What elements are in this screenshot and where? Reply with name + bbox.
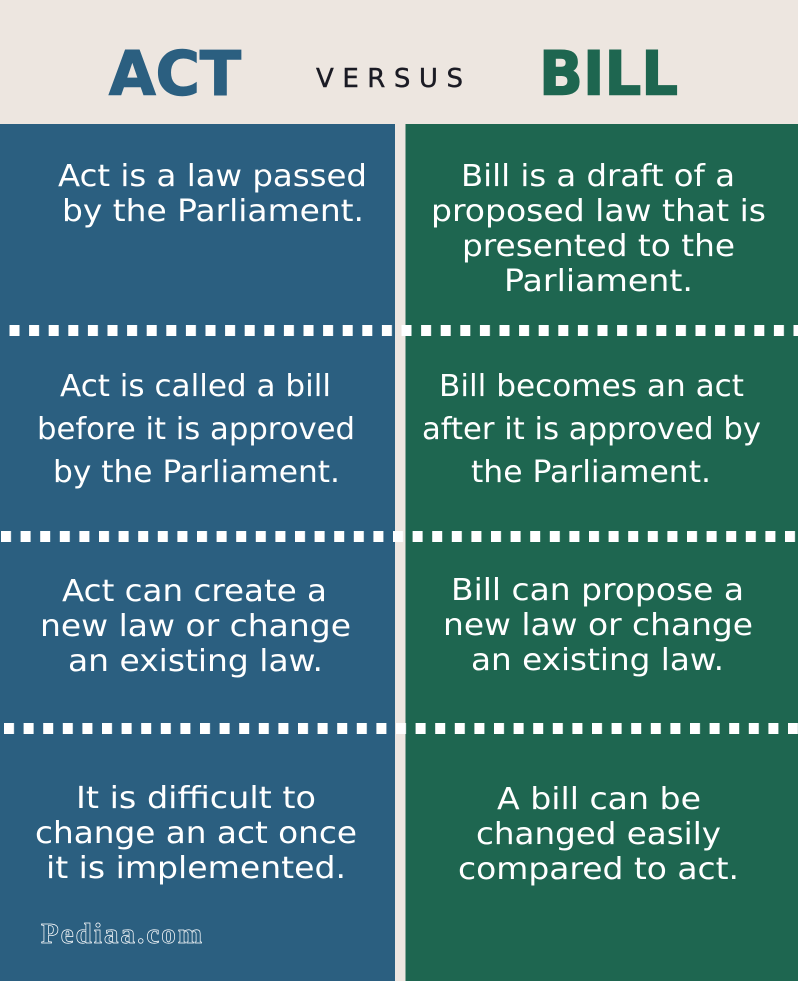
act point 4: change an act once	[35, 816, 357, 851]
act point 3: Act can create a	[62, 574, 327, 609]
bill point 3: an existing law.	[471, 643, 724, 678]
title: BILL: BILL	[539, 38, 678, 110]
watermark: Pediaa.com: Pediaa.com	[41, 918, 202, 950]
act point 2	[37, 369, 355, 490]
act point 3	[40, 574, 351, 679]
bill point 4: changed easily	[476, 817, 721, 852]
bill point 3	[443, 573, 753, 678]
act point 1: Act is a law passed	[58, 159, 367, 194]
divider row 1	[10, 325, 798, 336]
bill point 1: Bill is a draft of a	[461, 159, 735, 194]
act point 1: by the Parliament.	[62, 194, 364, 229]
divider row 2	[1, 531, 798, 542]
divider row 3	[4, 723, 798, 734]
bill point 2: the Parliament.	[471, 455, 711, 490]
act point 2: Act is called a bill	[60, 369, 331, 404]
act point 4: it is implemented.	[46, 851, 346, 886]
act point 2: by the Parliament.	[53, 455, 340, 490]
bill point 2: after it is approved by	[422, 412, 761, 447]
label: VERSUS: VERSUS	[316, 64, 463, 94]
act point 3: new law or change	[40, 609, 351, 644]
bill point 4: A bill can be	[497, 782, 701, 817]
act point 4	[35, 781, 357, 886]
title: ACT: ACT	[109, 38, 241, 110]
bill point 2: Bill becomes an act	[439, 369, 744, 404]
bill point 1	[431, 159, 766, 299]
bill point 2	[422, 369, 761, 490]
bill point 1: presented to the	[462, 229, 735, 264]
bill point 3: Bill can propose a	[451, 573, 744, 608]
bill point 3: new law or change	[443, 608, 753, 643]
act point 4: It is difficult to	[76, 781, 316, 816]
bill point 1: Parliament.	[504, 264, 693, 299]
act point 1	[58, 159, 367, 229]
bill point 4	[458, 782, 739, 887]
panel: bill column	[406, 124, 798, 981]
act point 3: an existing law.	[68, 644, 323, 679]
act point 2: before it is approved	[37, 412, 355, 447]
panel: act column	[0, 124, 395, 981]
bill point 4: compared to act.	[458, 852, 739, 887]
bill point 1: proposed law that is	[431, 194, 766, 229]
header background	[0, 0, 798, 124]
